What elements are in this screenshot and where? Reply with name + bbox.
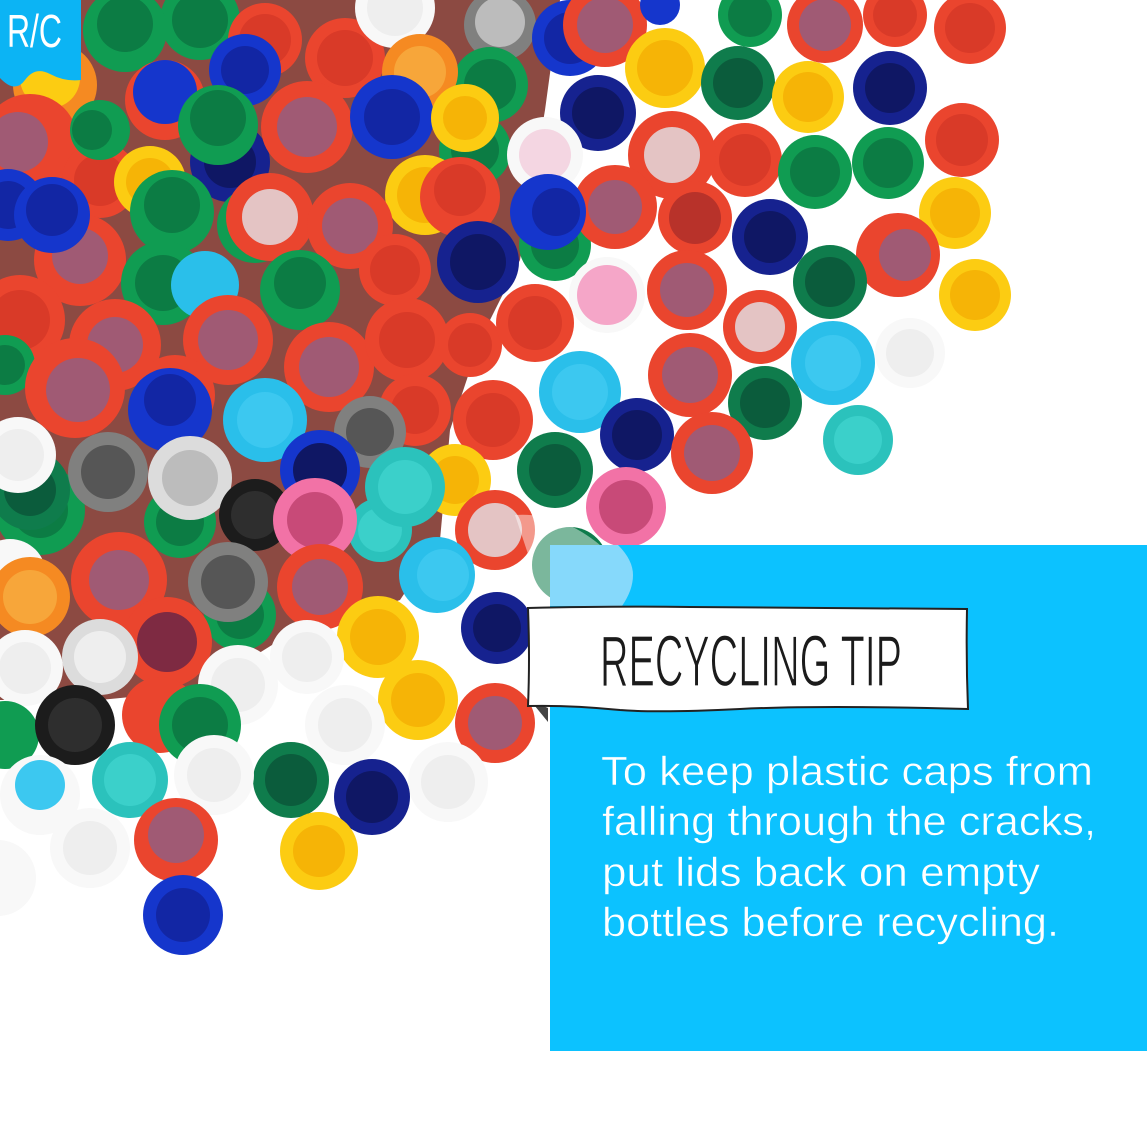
- text block: tip: To keep plastic caps from: [601, 748, 1093, 794]
- text block: tip: bottles before recycling.: [602, 899, 1059, 945]
- panel: blue tip box: [550, 545, 1147, 1051]
- text block: tip: put lids back on empty: [602, 849, 1041, 895]
- text block: tip: [601, 748, 1096, 945]
- logo: R/C: [0, 0, 81, 87]
- banner: recycling tip: [528, 607, 968, 722]
- photo: pile of plastic bottle caps: [0, 0, 1011, 955]
- heading: RECYCLING TIP: [600, 622, 902, 702]
- logo: R/C: R/C: [7, 5, 62, 57]
- text block: tip: falling through the cracks,: [602, 798, 1096, 844]
- translucent light circle on panel corner: [515, 515, 633, 606]
